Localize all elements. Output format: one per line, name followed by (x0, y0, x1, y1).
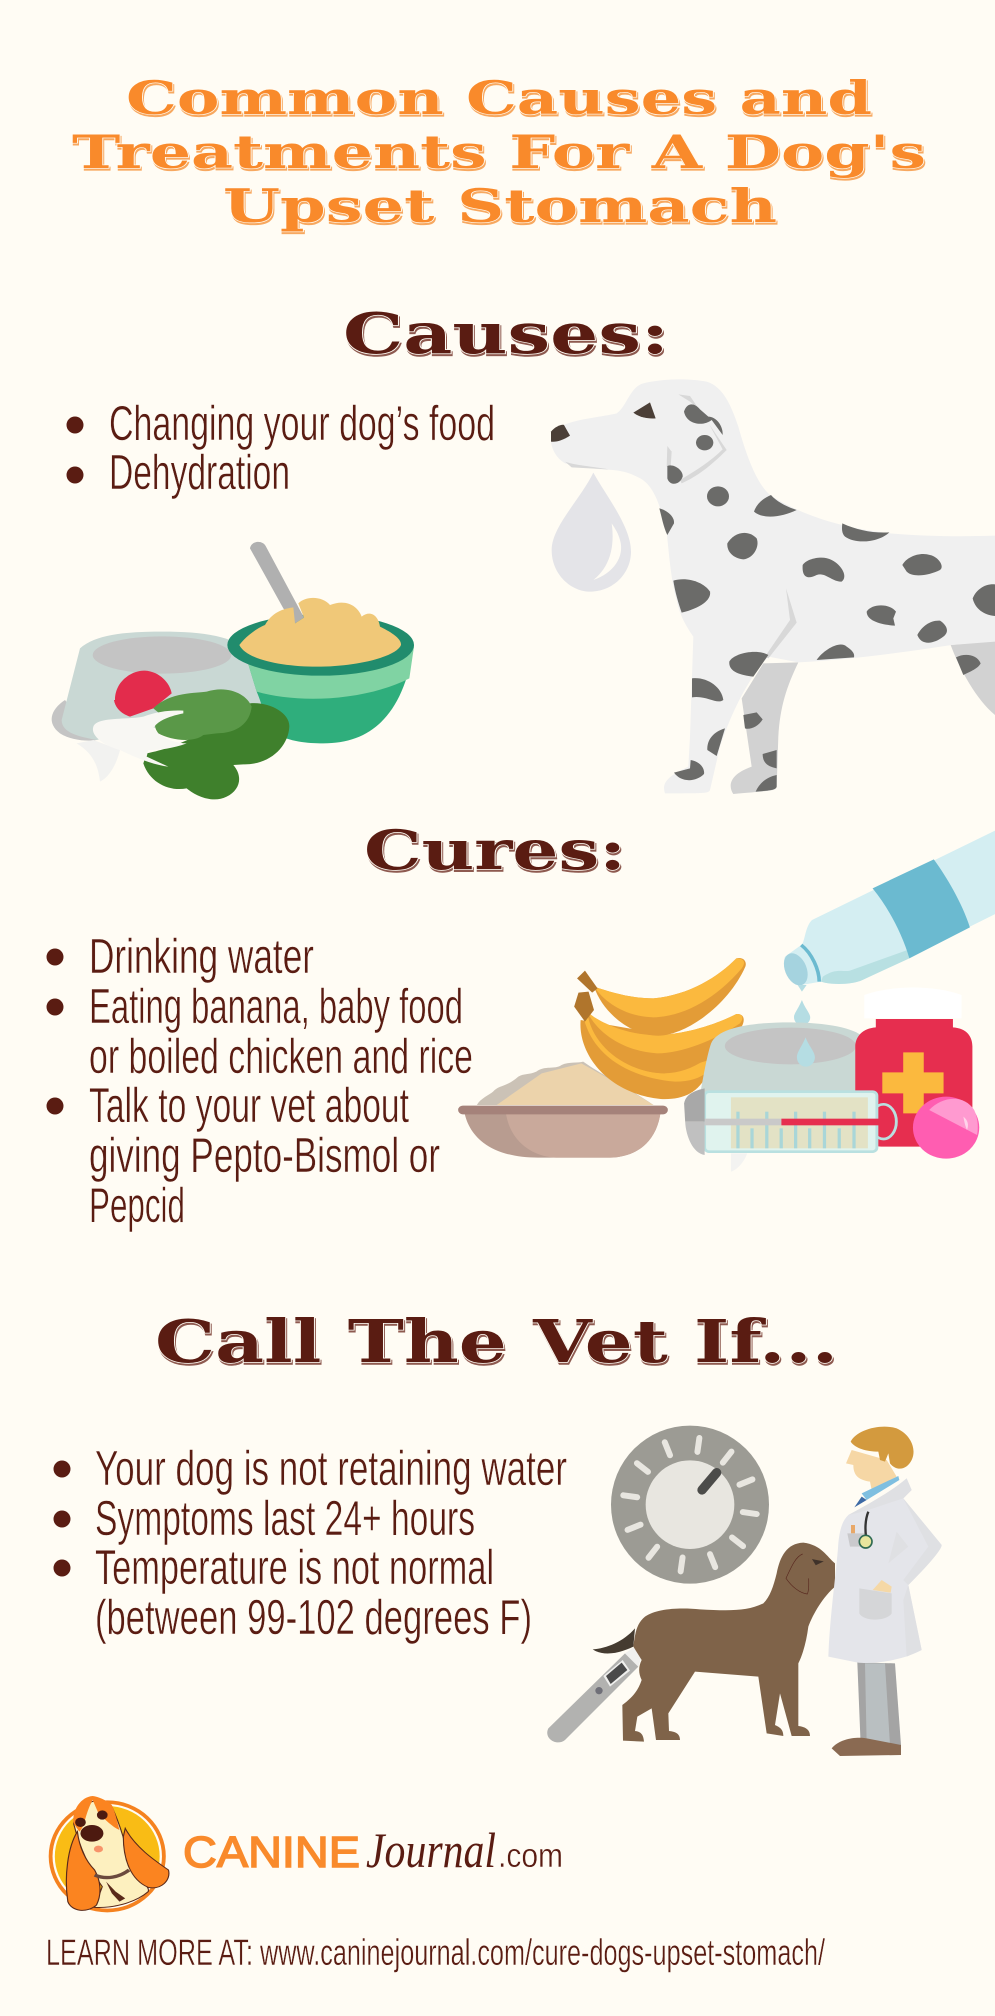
heading: call the vet: Call The Vet If... (155, 1307, 838, 1376)
list: causes (66, 397, 495, 500)
water drops (794, 985, 810, 1025)
nose and eye (551, 402, 656, 442)
green bowl band (246, 647, 414, 699)
title: Common Causes and (126, 71, 872, 125)
title: Treatments For A Dog's (72, 125, 926, 179)
list: cures: Talk to your vet about (89, 1079, 409, 1133)
list: call the vet (54, 1442, 567, 1645)
bottle neck ring (801, 945, 819, 982)
light greens (153, 689, 252, 740)
list: call the vet: Symptoms last 24+ hours (95, 1492, 475, 1546)
list: cures: Drinking water (89, 930, 314, 984)
drop in bowl (797, 1037, 815, 1067)
title: Upset Stomach (223, 179, 777, 233)
list: call the vet: Temperature is not normal (95, 1541, 494, 1595)
green bowl rim (227, 614, 414, 676)
top banana (594, 958, 746, 1036)
coat pockets and hand (847, 1525, 892, 1620)
list: causes: Changing your dog’s food (109, 397, 495, 451)
lowest banana highlight (584, 1012, 709, 1082)
illustration: dalmatian with drool drop (551, 379, 995, 794)
list: call the vet: Your dog is not retaining water (95, 1442, 567, 1496)
illustration: food bowls and greens (52, 542, 414, 799)
dog bowl inside (93, 636, 231, 674)
vet shoes (832, 1738, 901, 1756)
lowest banana (580, 1020, 715, 1099)
coat shading (848, 1478, 942, 1657)
rice (477, 1062, 653, 1105)
heading: causes: Causes: (343, 301, 669, 367)
green bowl body (245, 645, 414, 743)
medical cross (882, 1052, 944, 1113)
vet face (846, 1450, 897, 1490)
drop highlight (593, 523, 621, 580)
pale shadow (77, 740, 120, 782)
white stalk (93, 711, 187, 767)
middle banana (587, 1012, 744, 1073)
heading: cures: Cures: (364, 818, 626, 882)
list: causes: Dehydration (109, 446, 290, 500)
drool drop (552, 473, 631, 592)
far front leg (731, 662, 798, 794)
list: cures: Eating banana, baby food (89, 980, 463, 1034)
middle banana highlight (587, 1012, 742, 1053)
dalmatian spots (659, 404, 995, 792)
medicine jar lid (864, 987, 962, 1018)
vet hair (851, 1427, 914, 1469)
apple (114, 671, 172, 717)
porridge (239, 598, 401, 667)
bananas (574, 958, 746, 1099)
medicine jar (855, 1019, 972, 1147)
trouser highlight (865, 1663, 890, 1745)
temperature dial (611, 1426, 769, 1584)
logo wordmark: CANINE (183, 1828, 360, 1877)
rice bowl body (464, 1112, 661, 1158)
logo: canine journal (49, 1796, 563, 1912)
logo dog badge (49, 1796, 169, 1912)
dark greens (143, 703, 289, 799)
body creases (565, 394, 797, 658)
stethoscope (859, 1512, 872, 1548)
rice bowl light (506, 1112, 661, 1158)
list: call the vet: (between 99-102 degrees F) (95, 1591, 532, 1645)
pink pill (913, 1097, 979, 1159)
water bottle (784, 825, 995, 985)
dog bowl inside (725, 1028, 856, 1064)
vet coat (828, 1478, 942, 1663)
banana stems (577, 971, 598, 993)
rice bowl rim (458, 1106, 668, 1114)
list: cures: giving Pepto-Bismol or (89, 1129, 440, 1183)
thermometer (547, 1637, 655, 1742)
top banana highlight (594, 958, 744, 1017)
bottle label (873, 859, 970, 958)
logo script: Journal (366, 1822, 496, 1878)
vet shirt and tie (854, 1476, 899, 1507)
illustration: vet, dog and thermometer (547, 1426, 942, 1756)
spoon (250, 542, 304, 623)
brown dog (622, 1543, 835, 1742)
dog tail (593, 1628, 635, 1653)
bottle lower shade (821, 950, 909, 984)
dog bowl shadow (52, 700, 97, 741)
bottle mouth (779, 950, 812, 988)
vet trousers (857, 1662, 901, 1745)
dog bowl (700, 1022, 866, 1093)
dog ear and eye (786, 1554, 822, 1594)
title (72, 71, 926, 233)
dog bowl (62, 632, 262, 740)
list: cures: Pepcid (89, 1179, 185, 1233)
logo domain: .com (498, 1837, 563, 1875)
list: cures (46, 930, 473, 1233)
hind leg (951, 641, 995, 715)
dog body (551, 379, 995, 793)
rice highlight (497, 1063, 653, 1105)
syringe (684, 1088, 896, 1172)
illustration: cures items (458, 825, 995, 1172)
list: cures: or boiled chicken and rice (89, 1030, 473, 1084)
